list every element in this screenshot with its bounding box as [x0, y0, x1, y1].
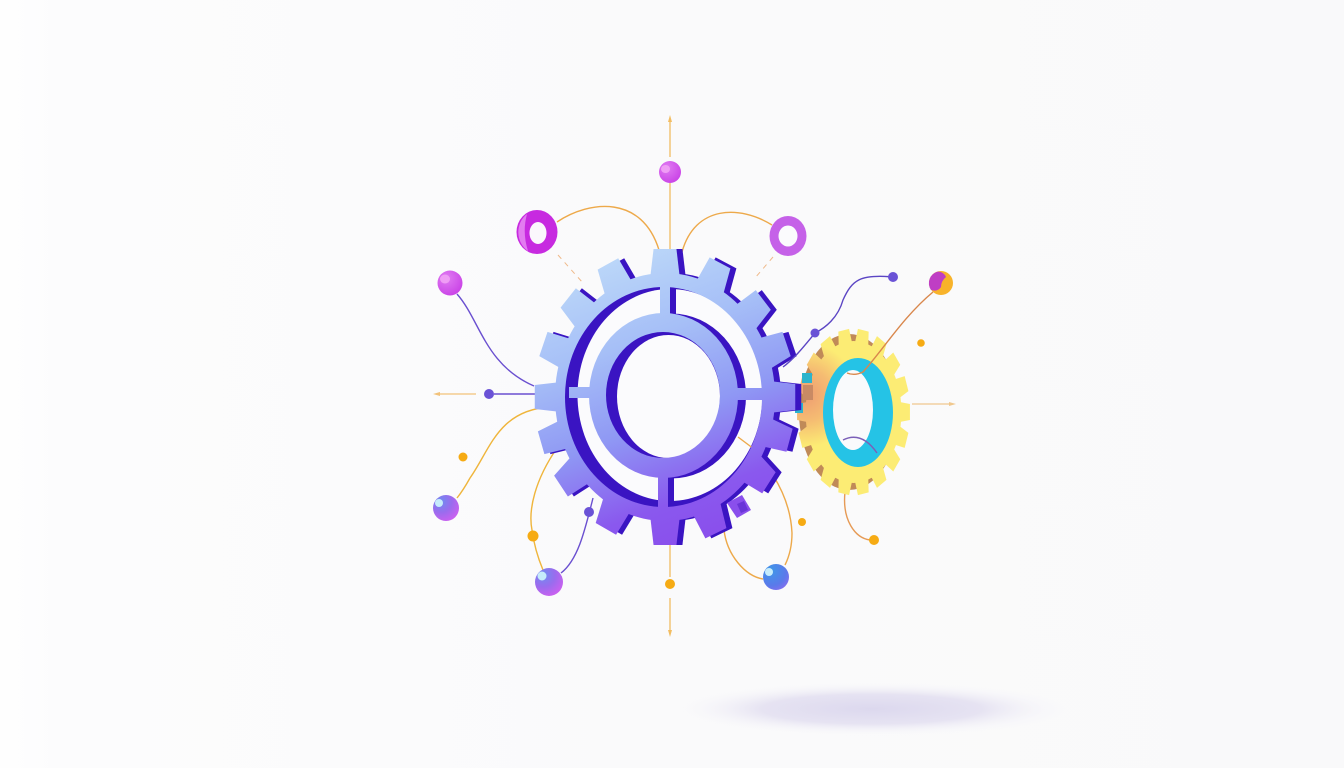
connector curves over yellow gear — [783, 276, 933, 453]
node: bottom left ball — [535, 568, 563, 596]
large gear: outer opening — [578, 289, 762, 501]
dashed connectors — [558, 255, 773, 283]
connector curves: purple — [457, 294, 593, 573]
large gear: small bracket — [727, 495, 751, 518]
node: violet ring right — [770, 216, 806, 256]
node: two-tone ball — [929, 271, 953, 295]
node: left lower ball — [433, 495, 459, 521]
connector curves: orange — [457, 206, 870, 579]
yellow gear: side faces — [799, 334, 899, 490]
yellow gear: cyan ring — [823, 358, 893, 467]
vertical axis arrow: bottom — [668, 545, 672, 637]
node: bottom right ball — [763, 564, 789, 590]
large gear: inner ring depth — [597, 314, 746, 478]
floor shadow — [672, 682, 1072, 736]
horizontal axis arrow: right — [912, 402, 956, 406]
large gear: front face — [534, 249, 796, 545]
node: top ball — [659, 161, 681, 183]
line seen through opening — [738, 437, 754, 449]
horizontal axis arrow: left — [433, 392, 476, 396]
small dots: purple — [484, 272, 898, 517]
large gear: purple — [534, 249, 802, 545]
yellow gear: ring opening — [833, 370, 873, 450]
yellow gear: front face — [797, 328, 910, 496]
vertical axis arrow: top — [668, 115, 672, 252]
small dots: orange — [458, 339, 925, 589]
yellow gear: cyan meshing tabs — [795, 373, 813, 413]
node: magenta ring left — [516, 210, 558, 254]
large gear: spoke depth — [668, 288, 676, 508]
large gear: centre opening — [617, 335, 720, 458]
small gear: yellow — [795, 328, 910, 496]
large gear: extruded depth — [541, 249, 801, 545]
node: left upper ball — [438, 270, 462, 296]
